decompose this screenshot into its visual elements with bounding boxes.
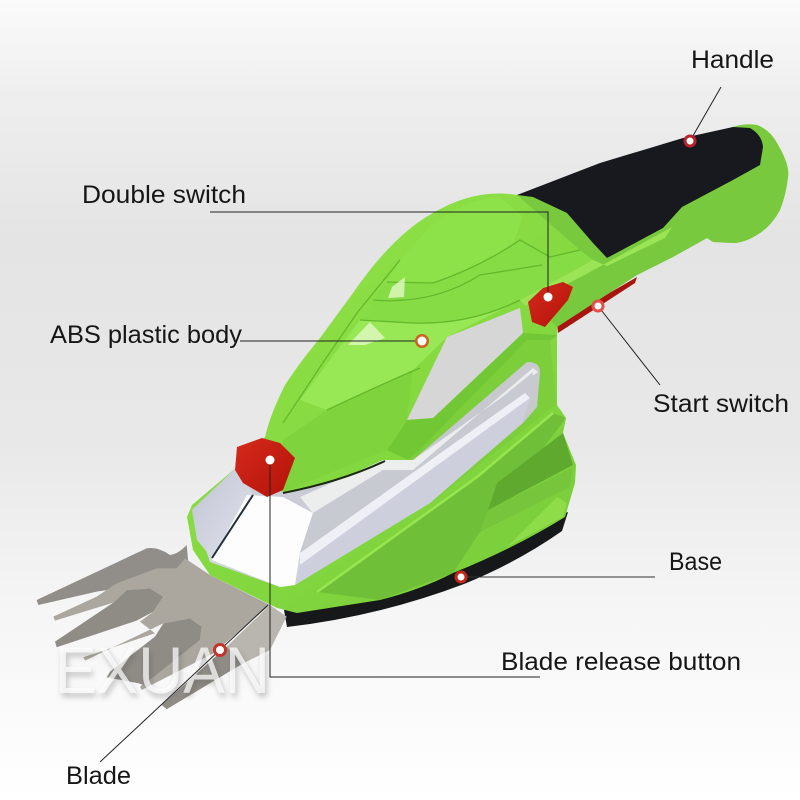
lower shell ridges <box>317 413 553 592</box>
base mid facet <box>480 468 572 532</box>
plate upper highlight <box>300 368 538 513</box>
handle green <box>517 124 788 327</box>
base ridge <box>507 497 567 547</box>
handle band highlight <box>520 227 672 306</box>
leader: double switch <box>210 212 548 297</box>
red double switch <box>528 282 573 327</box>
label: Blade: Blade <box>66 762 131 790</box>
leader: start switch <box>598 306 660 385</box>
green shell <box>187 124 788 613</box>
white plate facet <box>212 495 313 587</box>
marker dots <box>213 134 696 657</box>
silver plate <box>192 362 540 587</box>
base rubber strip <box>284 512 568 627</box>
leader: blade release button <box>270 460 540 677</box>
label: Base: Base <box>669 548 722 576</box>
window-plate strip <box>387 333 557 460</box>
watermark: EXUAN <box>55 633 270 707</box>
leader: handle <box>690 87 721 141</box>
left plate facet <box>192 467 253 558</box>
plate gray band <box>300 372 533 553</box>
leader: ABS plastic body <box>240 340 422 342</box>
lower base panel <box>317 413 566 600</box>
illustration: hedge trimmer <box>37 124 788 709</box>
shell glints <box>348 277 405 345</box>
rubber handle grip <box>517 127 763 258</box>
label: Handle: Handle <box>691 46 774 74</box>
shell curves <box>283 240 580 423</box>
label: ABS plastic body: ABS plastic body <box>50 321 242 349</box>
leader: base <box>461 576 655 578</box>
shell ridge bands <box>360 240 593 323</box>
red front button <box>235 438 295 497</box>
leader: blade <box>100 605 268 762</box>
label: Blade release button: Blade release button <box>501 648 741 676</box>
label: Double switch: Double switch <box>82 181 246 209</box>
shell top facet <box>387 197 523 283</box>
trigger <box>557 277 637 333</box>
lower shell facet <box>283 370 413 492</box>
label: Start switch: Start switch <box>653 390 789 418</box>
base dark facet <box>488 433 573 510</box>
plate seam <box>212 495 253 558</box>
blade <box>37 545 287 709</box>
grip window <box>407 308 523 420</box>
plate lower highlight <box>300 393 530 565</box>
